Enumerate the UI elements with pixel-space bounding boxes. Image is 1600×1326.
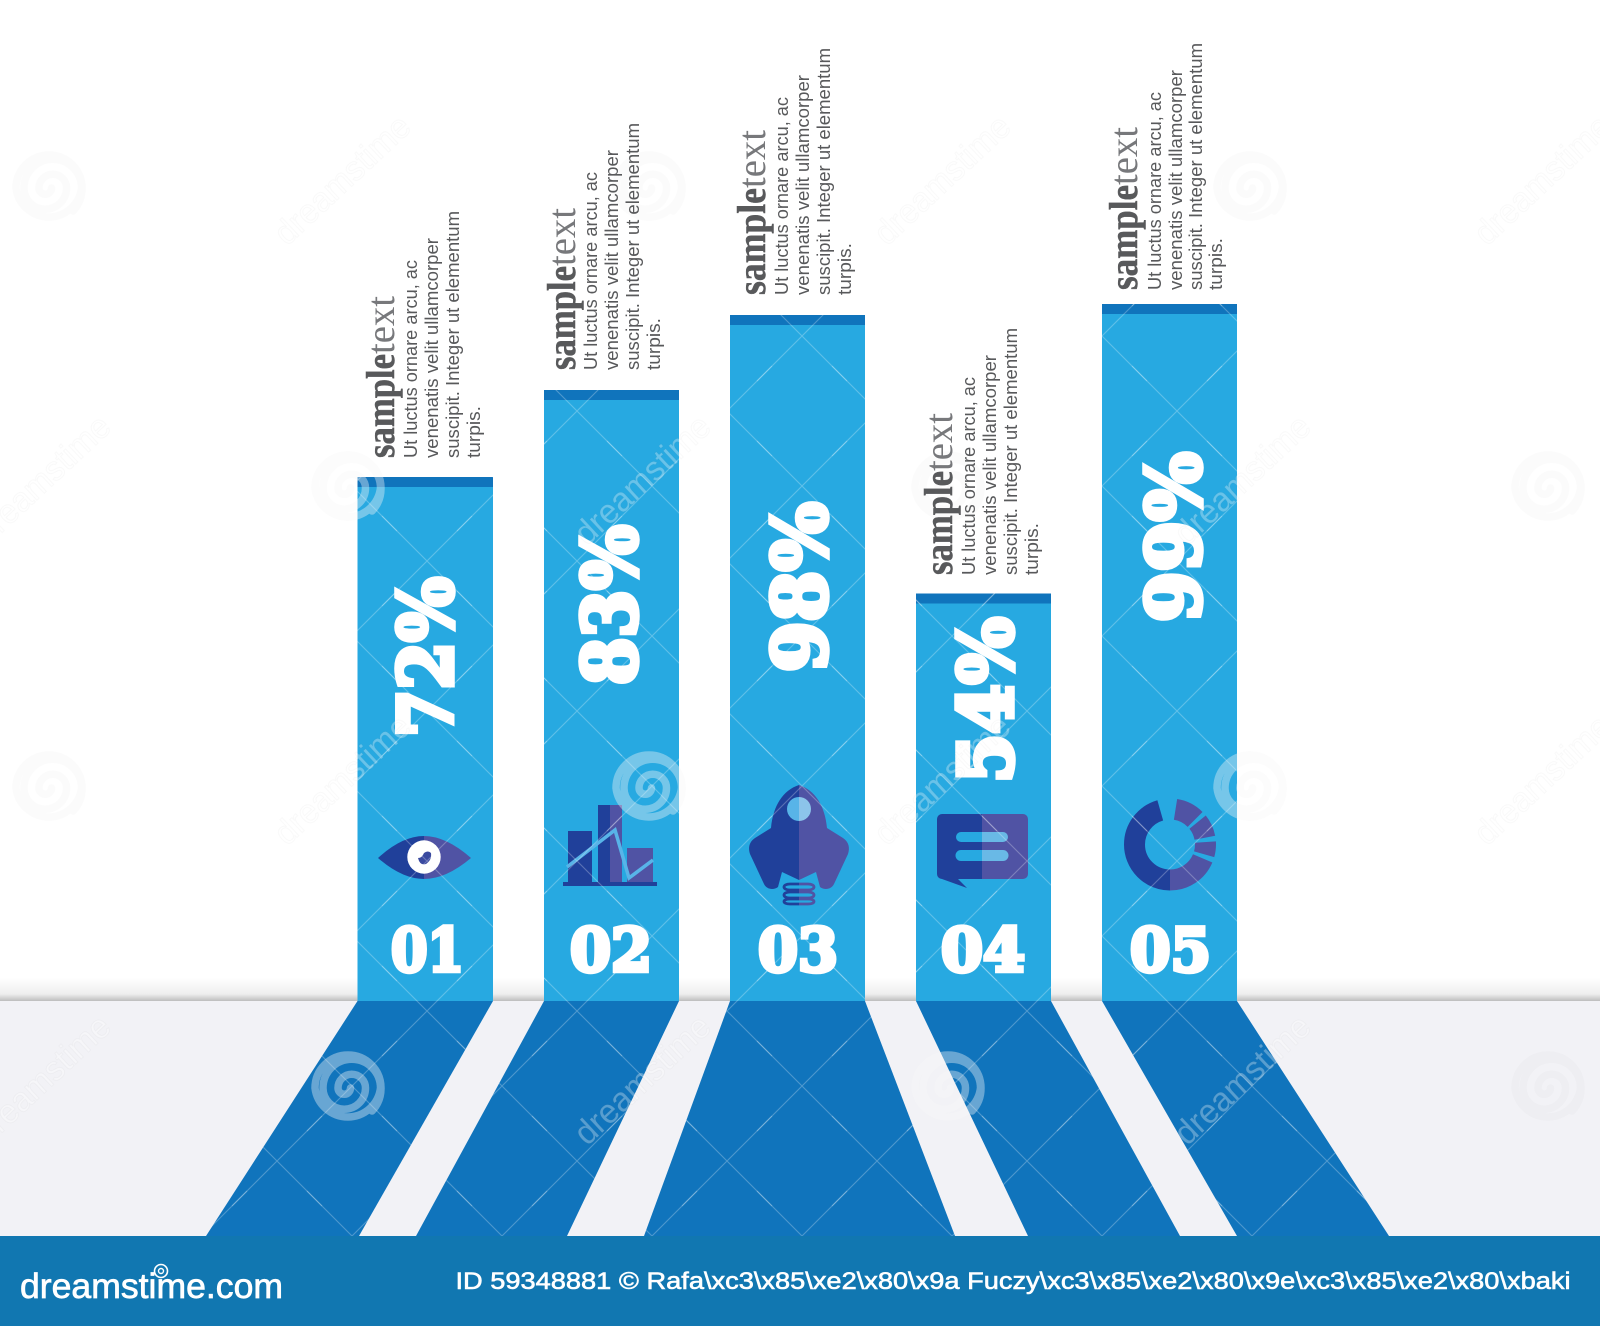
- icon: rocket: [749, 785, 849, 904]
- text block 04: suscipit. Integer ut elementum: [1001, 328, 1021, 575]
- footer logo: dreamstime.com: [20, 1267, 283, 1306]
- bar 05 top band: [1102, 304, 1237, 314]
- text block 02: turpis.: [644, 318, 664, 370]
- watermark spirals: [16, 155, 1581, 1117]
- bar 02: [544, 390, 679, 1001]
- text block 01: venenatis velit ullamcorper: [422, 238, 442, 458]
- floor: [0, 1001, 1600, 1236]
- text block 05: [1101, 43, 1226, 290]
- number 02: 02: [570, 916, 652, 986]
- bar 02 top band: [544, 390, 679, 400]
- column 03: [729, 48, 865, 1001]
- percent 83%: 83%: [568, 525, 654, 685]
- text block 04: Ut luctus ornare arcu, ac: [959, 377, 979, 575]
- text block 02: Ut luctus ornare arcu, ac: [581, 172, 601, 370]
- text block 05: sampletext: [1101, 127, 1146, 290]
- percent 72%: 72%: [384, 577, 470, 737]
- bar 03: [730, 315, 865, 1001]
- text block 01: suscipit. Integer ut elementum: [443, 211, 463, 458]
- text block 04: sampletext: [916, 413, 961, 575]
- bar 01 top band: [358, 477, 493, 487]
- column 01: [358, 211, 493, 1001]
- column 04: [916, 328, 1051, 1001]
- percent 98%: 98%: [758, 502, 844, 672]
- text block 01: turpis.: [464, 406, 484, 458]
- watermark wordmarks: dreamstime: [867, 707, 1018, 853]
- text block 04: turpis.: [1022, 523, 1042, 575]
- icon: speech bubble: [937, 814, 1028, 888]
- bar 05: [1102, 304, 1237, 1001]
- column 05: [1101, 43, 1237, 1001]
- text block 01: [358, 211, 484, 458]
- number 05: 05: [1130, 916, 1211, 986]
- icon: bar chart with line: [563, 805, 657, 886]
- text block 03: suscipit. Integer ut elementum: [814, 48, 834, 295]
- text block 04: [916, 328, 1042, 575]
- number 03: 03: [758, 916, 838, 986]
- bar 03 top band: [730, 315, 865, 325]
- text block 05: Ut luctus ornare arcu, ac: [1145, 92, 1165, 290]
- text block 05: suscipit. Integer ut elementum: [1186, 43, 1206, 290]
- watermark cross lines: [212, 304, 1367, 1236]
- watermark wordmarks: dreamstime: [267, 107, 418, 253]
- percent 99%: 99%: [1132, 452, 1218, 622]
- watermark wordmarks: dreamstime: [1167, 1007, 1318, 1153]
- floor shadows of bars: [206, 1001, 1389, 1236]
- icon: segmented donut: [1134, 809, 1206, 880]
- text block 03: sampletext: [729, 130, 774, 295]
- number 01: 01: [391, 916, 464, 986]
- text block 03: turpis.: [835, 243, 855, 295]
- text block 05: turpis.: [1206, 238, 1226, 290]
- footer bar: [0, 1236, 1600, 1326]
- icon: eye: [378, 836, 471, 879]
- text block 03: venenatis velit ullamcorper: [793, 75, 813, 295]
- watermark wordmarks: dreamstime: [867, 107, 1018, 253]
- wall shadow band: [0, 978, 1600, 1001]
- watermark wordmarks: dreamstime: [567, 1007, 718, 1153]
- text block 02: suscipit. Integer ut elementum: [623, 123, 643, 370]
- text block 04: venenatis velit ullamcorper: [980, 355, 1000, 575]
- text block 02: sampletext: [539, 208, 584, 370]
- text block 03: Ut luctus ornare arcu, ac: [772, 97, 792, 295]
- footer credit: ID 59348881 © Rafa\xc3\x85\xe2\x80\x9a Fuczy\xc3\x85\xe2\x80\x9e\xc3\x85\xe2\x80\xbaki: [456, 1268, 1570, 1295]
- bar 01: [358, 477, 493, 1001]
- percent 54%: 54%: [944, 617, 1030, 783]
- watermark wordmarks: dreamstime: [567, 407, 718, 553]
- watermark wordmarks: dreamstime: [267, 707, 418, 853]
- text block 03: [729, 48, 855, 295]
- watermark wordmarks: [0, 107, 1600, 1153]
- text block 02: [539, 123, 664, 370]
- text block 01: Ut luctus ornare arcu, ac: [401, 260, 421, 458]
- watermark wordmarks: dreamstime: [1167, 407, 1318, 553]
- text block 01: sampletext: [358, 296, 403, 458]
- column 02: [539, 123, 679, 1001]
- text block 02: venenatis velit ullamcorper: [602, 150, 622, 370]
- number 04: 04: [941, 916, 1025, 986]
- bar 04: [916, 594, 1051, 1001]
- bar 04 top band: [916, 594, 1051, 604]
- text block 05: venenatis velit ullamcorper: [1166, 70, 1186, 290]
